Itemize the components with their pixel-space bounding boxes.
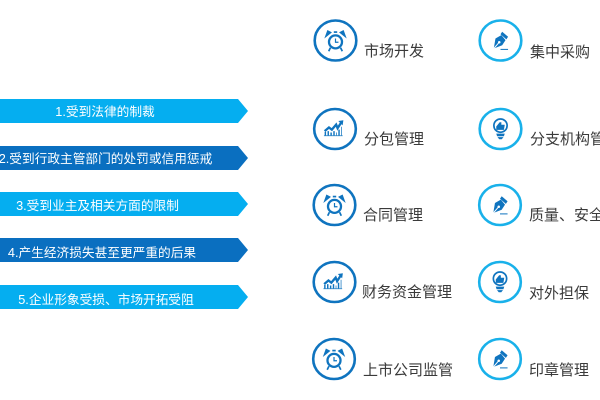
arrow bar 4: 4.产生经济损失甚至更严重的后果 [8,245,196,260]
item: 对外担保 [479,262,589,302]
item: 质量、安全 [479,185,600,225]
arrow bar 5: 5.企业形象受损、市场开拓受阻 [18,292,194,307]
arrow bar 3 [0,192,248,216]
arrow bar 1: 1.受到法律的制裁 [55,104,155,119]
item: 财务资金管理 [314,262,452,302]
item: 分包管理 [314,109,424,149]
item: 印章管理: 印章管理 [529,361,589,379]
item: 分支机构管 [480,109,600,149]
item: 市场开发 [315,20,424,60]
item: 市场开发: 市场开发 [364,43,424,60]
item: 合同管理 [314,185,423,225]
item: 集中采购: 集中采购 [530,44,590,61]
item: 集中采购 [480,20,590,61]
item: 分包管理: 分包管理 [364,131,424,148]
item: 对外担保: 对外担保 [529,285,589,302]
item: 合同管理: 合同管理 [363,207,423,224]
item: 财务资金管理: 财务资金管理 [362,284,452,301]
item: 印章管理 [479,339,589,379]
arrow bar 1 [0,99,248,123]
arrow bar 5 [0,285,248,309]
arrow bar 4 [0,238,248,262]
item: 上市公司监管: 上市公司监管 [363,362,453,379]
arrow bar 3: 3.受到业主及相关方面的限制 [16,198,179,213]
arrow bar 2: 2.受到行政主管部门的处罚或信用惩戒 [0,151,213,166]
item: 上市公司监管 [313,339,453,379]
arrow bar 2 [0,146,248,170]
